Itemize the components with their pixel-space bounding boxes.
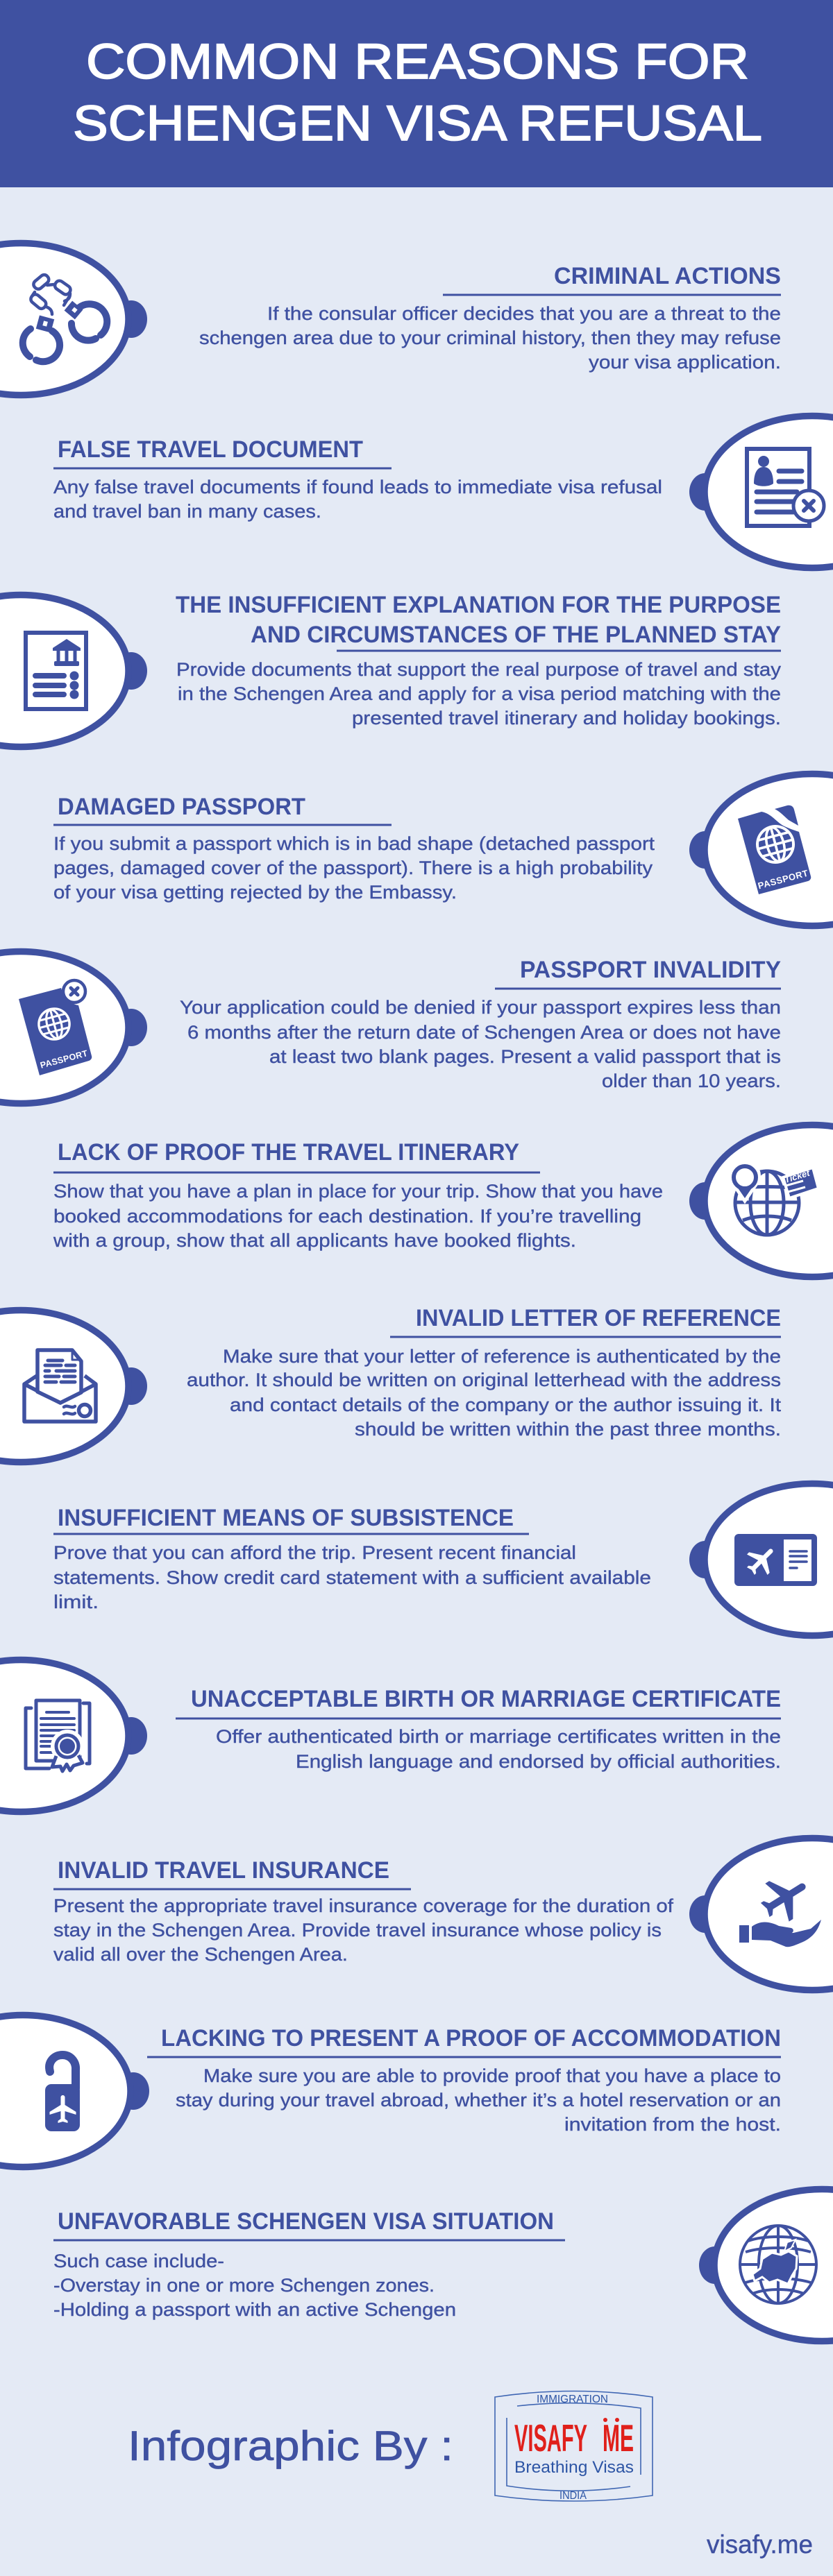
body text: and contact details of the company or the author issuing it. It [230, 1394, 782, 1415]
body text: booked accommodations for each destination. If you’re travelling [53, 1206, 641, 1227]
body text: Such case include- [53, 2251, 224, 2271]
panel: invalid travel insurance [53, 1839, 833, 1990]
body text: Make sure you are able to provide proof that you have a place to [203, 2065, 781, 2086]
icon: document with cross [747, 449, 824, 526]
icon: torn passport [738, 805, 811, 894]
body text: of your visa getting rejected by the Embassy. [53, 882, 457, 903]
heading: INSUFFICIENT MEANS OF SUBSISTENCE [58, 1505, 514, 1531]
body text: -Holding a passport with an active Schengen [53, 2299, 456, 2320]
title line 2: SCHENGEN VISA REFUSAL [73, 96, 762, 151]
logo text: me [603, 2416, 634, 2459]
icon badge: right oval [689, 1125, 833, 1277]
body text [53, 2251, 456, 2320]
logo text: me: ME [603, 2416, 634, 2459]
body text: Show that you have a plan in place for your trip. Show that you have [53, 1181, 663, 1202]
heading: INVALID LETTER OF REFERENCE [416, 1305, 781, 1331]
body text: English language and endorsed by official authorities. [296, 1751, 781, 1772]
body text [199, 303, 781, 373]
body text: older than 10 years. [602, 1071, 781, 1091]
body text: and travel ban in many cases. [53, 501, 321, 522]
icon: globe with Europe [740, 2226, 816, 2303]
icon badge: left oval [0, 952, 147, 1103]
icon badge: left oval [0, 2015, 149, 2167]
body text: -Overstay in one or more Schengen zones. [53, 2275, 435, 2296]
panel: unacceptable birth or marriage certificate [0, 1660, 781, 1812]
icon badge: right oval [689, 1839, 833, 1990]
panel: proof of accommodation [0, 2015, 781, 2167]
body text: statements. Show credit card statement with a sufficient available [53, 1567, 651, 1588]
body text: Present the appropriate travel insurance coverage for the duration of [53, 1895, 674, 1916]
body text: Your application could be denied if your passport expires less than [180, 997, 781, 1018]
body text [176, 2065, 781, 2135]
body text: If you submit a passport which is in bad shape (detached passport [53, 833, 655, 854]
body text: Offer authenticated birth or marriage certificates written in the [216, 1726, 781, 1747]
logo text: breathing visas: Breathing Visas [514, 2458, 634, 2477]
body text: If the consular officer decides that you are a threat to the [267, 303, 781, 324]
body text: stay in the Schengen Area. Provide travel insurance whose policy is [53, 1920, 662, 1940]
body text [180, 997, 781, 1091]
title banner [0, 0, 833, 187]
body text [187, 1346, 782, 1440]
icon: handcuffs [23, 273, 107, 361]
panel: damaged passport [53, 774, 833, 926]
credit: infographic by: Infographic By : [128, 2423, 453, 2469]
body text: Make sure that your letter of reference is authenticated by the [223, 1346, 781, 1367]
heading: FALSE TRAVEL DOCUMENT [58, 436, 363, 463]
body text [53, 1181, 663, 1251]
panel: passport invalidity [0, 952, 781, 1103]
body text [53, 833, 655, 903]
icon badge: left oval [0, 1310, 147, 1462]
heading: CRIMINAL ACTIONS [554, 263, 781, 289]
icon: certificate with seal [26, 1700, 90, 1771]
heading: UNFAVORABLE SCHENGEN VISA SITUATION [58, 2208, 554, 2235]
title line 1: COMMON REASONS FOR [86, 35, 749, 89]
body text: Prove that you can afford the trip. Present recent financial [53, 1542, 576, 1563]
body text: pages, damaged cover of the passport). There is a high probability [53, 858, 653, 878]
logo text: immigration: IMMIGRATION [537, 2394, 608, 2405]
heading: LACK OF PROOF THE TRAVEL ITINERARY [58, 1139, 519, 1166]
body text: Provide documents that support the real purpose of travel and stay [176, 659, 782, 680]
icon: torn passport: PASSPORT [757, 868, 809, 891]
body text [216, 1726, 781, 1772]
icon badge: left oval [0, 243, 147, 395]
icon badge: right oval [689, 774, 833, 926]
body text [53, 1542, 651, 1612]
body text: at least two blank pages. Present a valid passport that is [269, 1046, 781, 1067]
body text: author. It should be written on original letterhead with the address [187, 1370, 781, 1390]
icon: door hanger [45, 2055, 80, 2131]
body text: presented travel itinerary and holiday bookings. [352, 708, 781, 728]
icon badge: right oval [699, 2190, 833, 2341]
icon badge: right oval [689, 416, 833, 568]
heading: INVALID TRAVEL INSURANCE [58, 1857, 389, 1884]
icon: passport with cross [19, 980, 92, 1075]
body text: should be written within the past three months. [355, 1419, 781, 1440]
body text [53, 1895, 674, 1965]
body text: stay during your travel abroad, whether it’s a hotel reservation or an [176, 2090, 781, 2110]
panel: unfavorable schengen visa situation [53, 2190, 833, 2341]
panel: lack of proof of travel itinerary [53, 1125, 833, 1277]
icon: envelope with letter [24, 1350, 96, 1422]
body text: invitation from the host. [564, 2114, 781, 2135]
logo: Visafy Me stamp [495, 2391, 653, 2502]
panel: criminal actions [0, 243, 781, 395]
icon badge: left oval [0, 595, 147, 747]
icon badge: right oval [689, 1483, 833, 1636]
icon: bank document [26, 633, 86, 709]
heading: PASSPORT INVALIDITY [520, 957, 781, 983]
heading [176, 592, 781, 648]
body text: limit. [53, 1592, 99, 1612]
icon: plane over hand [739, 1866, 821, 1947]
body text: schengen area due to your criminal history, then they may refuse [199, 327, 781, 348]
panel: insufficient explanation [0, 592, 782, 747]
icon: globe with pin and ticket: Ticket [783, 1168, 811, 1185]
heading: THE INSUFFICIENT EXPLANATION FOR THE PURPOSE [176, 592, 781, 618]
body text: your visa application. [589, 352, 781, 373]
panel: insufficient means of subsistence [53, 1483, 833, 1636]
body text: Any false travel documents if found leads to immediate visa refusal [53, 477, 662, 497]
panel: false travel document [53, 416, 833, 568]
logo text: visafy: VISAFY [514, 2416, 587, 2459]
body text: valid all over the Schengen Area. [53, 1944, 348, 1965]
website url: visafy.me [707, 2530, 813, 2559]
heading: UNACCEPTABLE BIRTH OR MARRIAGE CERTIFICATE [191, 1686, 781, 1712]
icon: boarding pass [734, 1534, 817, 1586]
icon: globe with pin and ticket [731, 1162, 818, 1235]
body text [176, 659, 782, 728]
body text: in the Schengen Area and apply for a visa period matching with the [178, 683, 781, 704]
panel: invalid letter of reference [0, 1305, 782, 1462]
heading: LACKING TO PRESENT A PROOF OF ACCOMMODATION [161, 2025, 781, 2052]
heading: AND CIRCUMSTANCES OF THE PLANNED STAY [251, 622, 781, 648]
body text: 6 months after the return date of Schengen Area or does not have [187, 1022, 781, 1043]
icon badge: left oval [0, 1660, 147, 1812]
logo text: india: INDIA [559, 2490, 587, 2502]
icon: passport with cross: PASSPORT [39, 1048, 89, 1071]
body text [53, 477, 662, 522]
heading: DAMAGED PASSPORT [58, 794, 305, 820]
body text: with a group, show that all applicants have booked flights. [53, 1230, 576, 1251]
